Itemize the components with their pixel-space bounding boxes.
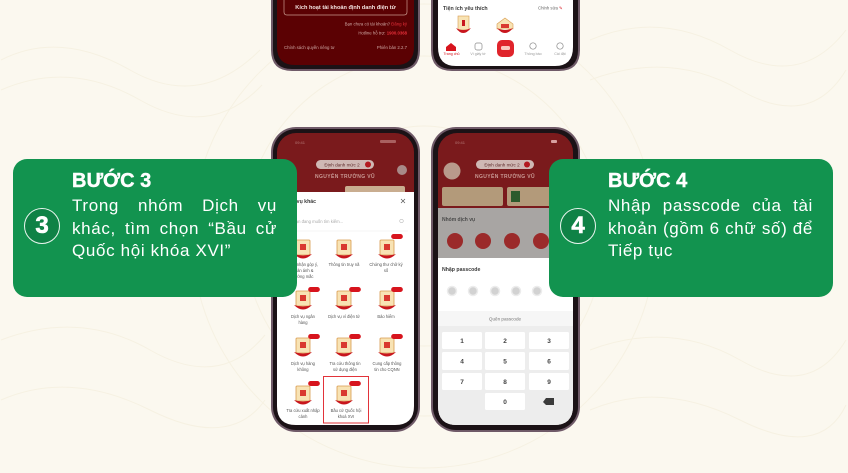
service row 3: tin cho CQNN: [374, 367, 400, 372]
service row 1: số: [384, 268, 389, 273]
step 3 description: Trong nhóm Dịch vụ khác, tìm chọn “Bầu cử Quốc hội khóa XVI”: [72, 196, 277, 260]
login links: [345, 22, 408, 50]
identity level pill: Định danh mức 2: [484, 162, 520, 168]
status bar: 09:41: [455, 140, 466, 145]
service row 3: [291, 334, 403, 372]
keypad: 3: [547, 338, 551, 345]
favourites heading: Tiện ích yêu thích: [443, 6, 488, 12]
card: step 3: [13, 159, 297, 297]
service row 2: Dịch vụ ngân: [291, 314, 316, 319]
service row 1: [288, 234, 404, 279]
keypad: 9: [547, 379, 551, 386]
service row 2: hàng: [298, 320, 308, 325]
button: activate account: [284, 0, 407, 15]
tab bar: Cài đặt: [554, 52, 566, 56]
service row 2: [291, 287, 403, 325]
service row 2: Bảo hiểm: [377, 314, 395, 319]
identity level pill: [316, 160, 374, 169]
keypad: 6: [547, 358, 551, 366]
tab bar: Thông báo: [524, 52, 542, 56]
keypad: 4: [460, 358, 464, 366]
services sheet: [277, 192, 414, 425]
privacy link: Chính sách quyền riêng tư: [284, 45, 335, 50]
passcode sheet: [438, 258, 573, 425]
step 3 number: 3: [35, 212, 49, 239]
service row 2: Dịch vụ ví điện tử: [328, 314, 360, 319]
keypad: 8: [503, 379, 507, 386]
passcode dots: [448, 286, 542, 296]
dimmed services area: Nhóm dịch vụ: [442, 217, 475, 223]
service row 3: Dịch vụ hàng: [291, 361, 316, 366]
keypad: 5: [503, 358, 507, 366]
edit link: Chỉnh sửa ✎: [538, 6, 563, 10]
phone: step 3 services: [271, 127, 420, 432]
status bar: [455, 140, 557, 145]
card: step 4: [549, 159, 833, 297]
dimmed services area: [438, 208, 573, 260]
forgot passcode: Quên passcode: [489, 316, 522, 322]
tab bar: Ví giấy tờ: [470, 52, 486, 56]
keypad: [438, 326, 573, 425]
info cards: [345, 186, 405, 196]
login links: Hotline hỗ trợ: 1900.0368: [358, 30, 408, 36]
phone: step 4 passcode: [431, 127, 580, 432]
info cards: [442, 187, 557, 206]
user name: NGUYỄN TRƯỜNG VŨ: [315, 172, 375, 180]
highlight: election service: [324, 376, 368, 423]
step 4 heading: BƯỚC 4: [608, 170, 687, 192]
icon: favourite one: [456, 16, 471, 33]
service row 3: sử dụng điện: [333, 367, 358, 372]
identity level pill: Định danh mức 2: [324, 162, 360, 168]
login links: Phiên bản 2.2.7: [377, 45, 408, 50]
icon: favourite two: [497, 18, 513, 33]
phone: top left login screen: [271, 0, 420, 71]
keypad: 1: [460, 338, 464, 345]
status bar: [295, 140, 396, 145]
sheet title: Nhập passcode: [442, 267, 480, 273]
button: activate account: Kích hoạt tài khoản định danh điện tử: [295, 5, 397, 11]
service row 3: Tra cứu thông tin: [329, 361, 361, 366]
phone: top right home screen: [431, 0, 580, 71]
status bar: 09:41: [295, 140, 306, 145]
login links: Bạn chưa có tài khoản? Đăng ký: [345, 22, 408, 26]
search field: Bạn đang muốn tìm kiếm...: [293, 219, 343, 224]
search button: [397, 165, 407, 175]
sheet title: Dịch vụ khác: [284, 199, 316, 205]
tab bar: Trang chủ: [443, 52, 460, 56]
service row 1: Thông tin truy nã: [329, 262, 360, 267]
step 4 description: Nhập passcode của tài khoản (gồm 6 chữ số) để Tiếp tục: [608, 196, 813, 260]
service row 4: khoá XVI: [338, 414, 354, 419]
service row 3: Cung cấp thông: [373, 361, 402, 366]
keypad: 0: [503, 399, 507, 406]
keypad: 7: [460, 379, 464, 386]
service row 4: cảnh: [299, 414, 308, 419]
step 3 number: [24, 208, 60, 244]
service row 1: vướng mắc: [293, 274, 313, 279]
service row 4: Tra cứu xuất nhập: [286, 408, 320, 413]
step 4 number: 4: [571, 212, 585, 239]
service row 4: [286, 381, 361, 419]
avatar: [444, 162, 460, 180]
service row 4: Bầu cử Quốc hội: [331, 408, 361, 413]
search field: [282, 219, 408, 231]
identity level pill: [476, 160, 534, 169]
icon: backspace: [543, 398, 554, 405]
user name: NGUYỄN TRƯỜNG VŨ: [475, 172, 535, 180]
step 3 heading: BƯỚC 3: [72, 170, 151, 192]
step 4 number: [560, 208, 596, 244]
service row 1: Chứng thư chữ ký: [369, 262, 404, 267]
close icon: [401, 199, 405, 203]
service row 1: phản ánh &: [293, 268, 314, 273]
service row 1: Tiếp nhận góp ý,: [288, 262, 318, 267]
forgot passcode: [438, 311, 573, 326]
tab bar: [443, 40, 566, 57]
service row 3: không: [297, 367, 309, 372]
keypad: 2: [503, 338, 507, 345]
